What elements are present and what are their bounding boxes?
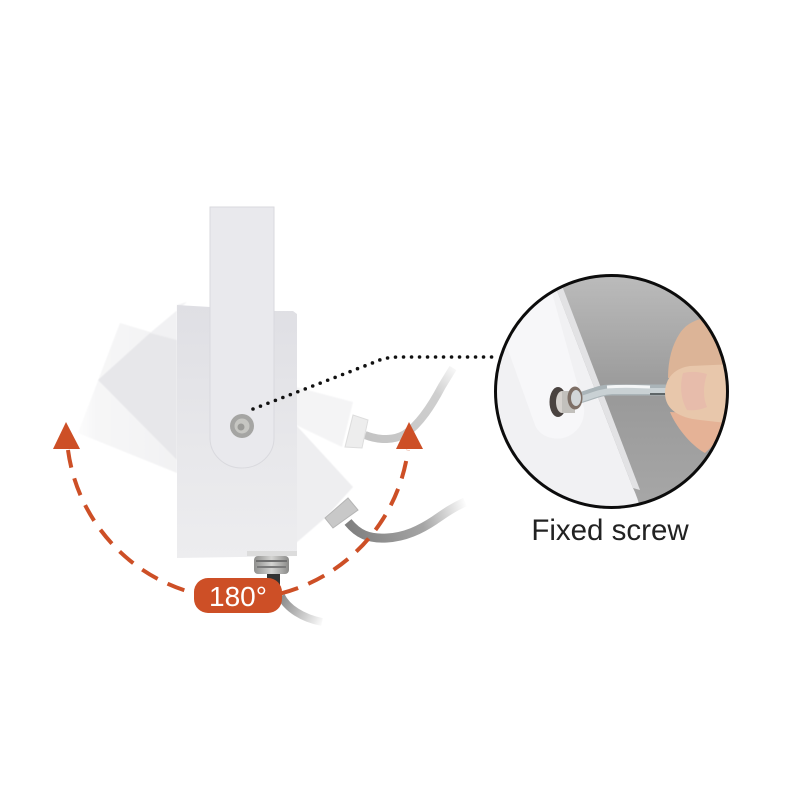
dotted leader line (253, 357, 497, 409)
rotation arc 180 degrees (53, 422, 423, 599)
lower grey cable (348, 502, 465, 538)
bottom cable and gland (254, 556, 322, 622)
lamp body front (177, 305, 297, 558)
screw head (550, 386, 582, 417)
180 degree badge (194, 578, 282, 613)
bracket screw (230, 414, 254, 438)
ghost: lamp body tilted right with cables (296, 368, 465, 543)
caption: Fixed screw (531, 514, 689, 547)
lower cable gland (325, 498, 358, 528)
upper cable gland (345, 415, 368, 448)
180 degree badge: 180° (209, 581, 267, 612)
grey background (557, 277, 712, 503)
lower finger (670, 412, 722, 453)
left arrowhead (53, 422, 80, 449)
thumb (665, 364, 726, 422)
circle outline (496, 276, 728, 508)
mounting bracket (210, 207, 274, 468)
thumb nail (681, 372, 707, 410)
dashed arc (68, 450, 408, 599)
white lamp body (497, 290, 638, 506)
bracket end (490, 270, 584, 439)
hex key wrench (575, 386, 666, 400)
upper grey cable (365, 368, 453, 439)
detail circle: fixed screw close-up (490, 270, 735, 515)
right arrowhead (396, 422, 423, 449)
ghost: lamp body tilted left (78, 302, 187, 473)
upper finger (668, 319, 723, 378)
